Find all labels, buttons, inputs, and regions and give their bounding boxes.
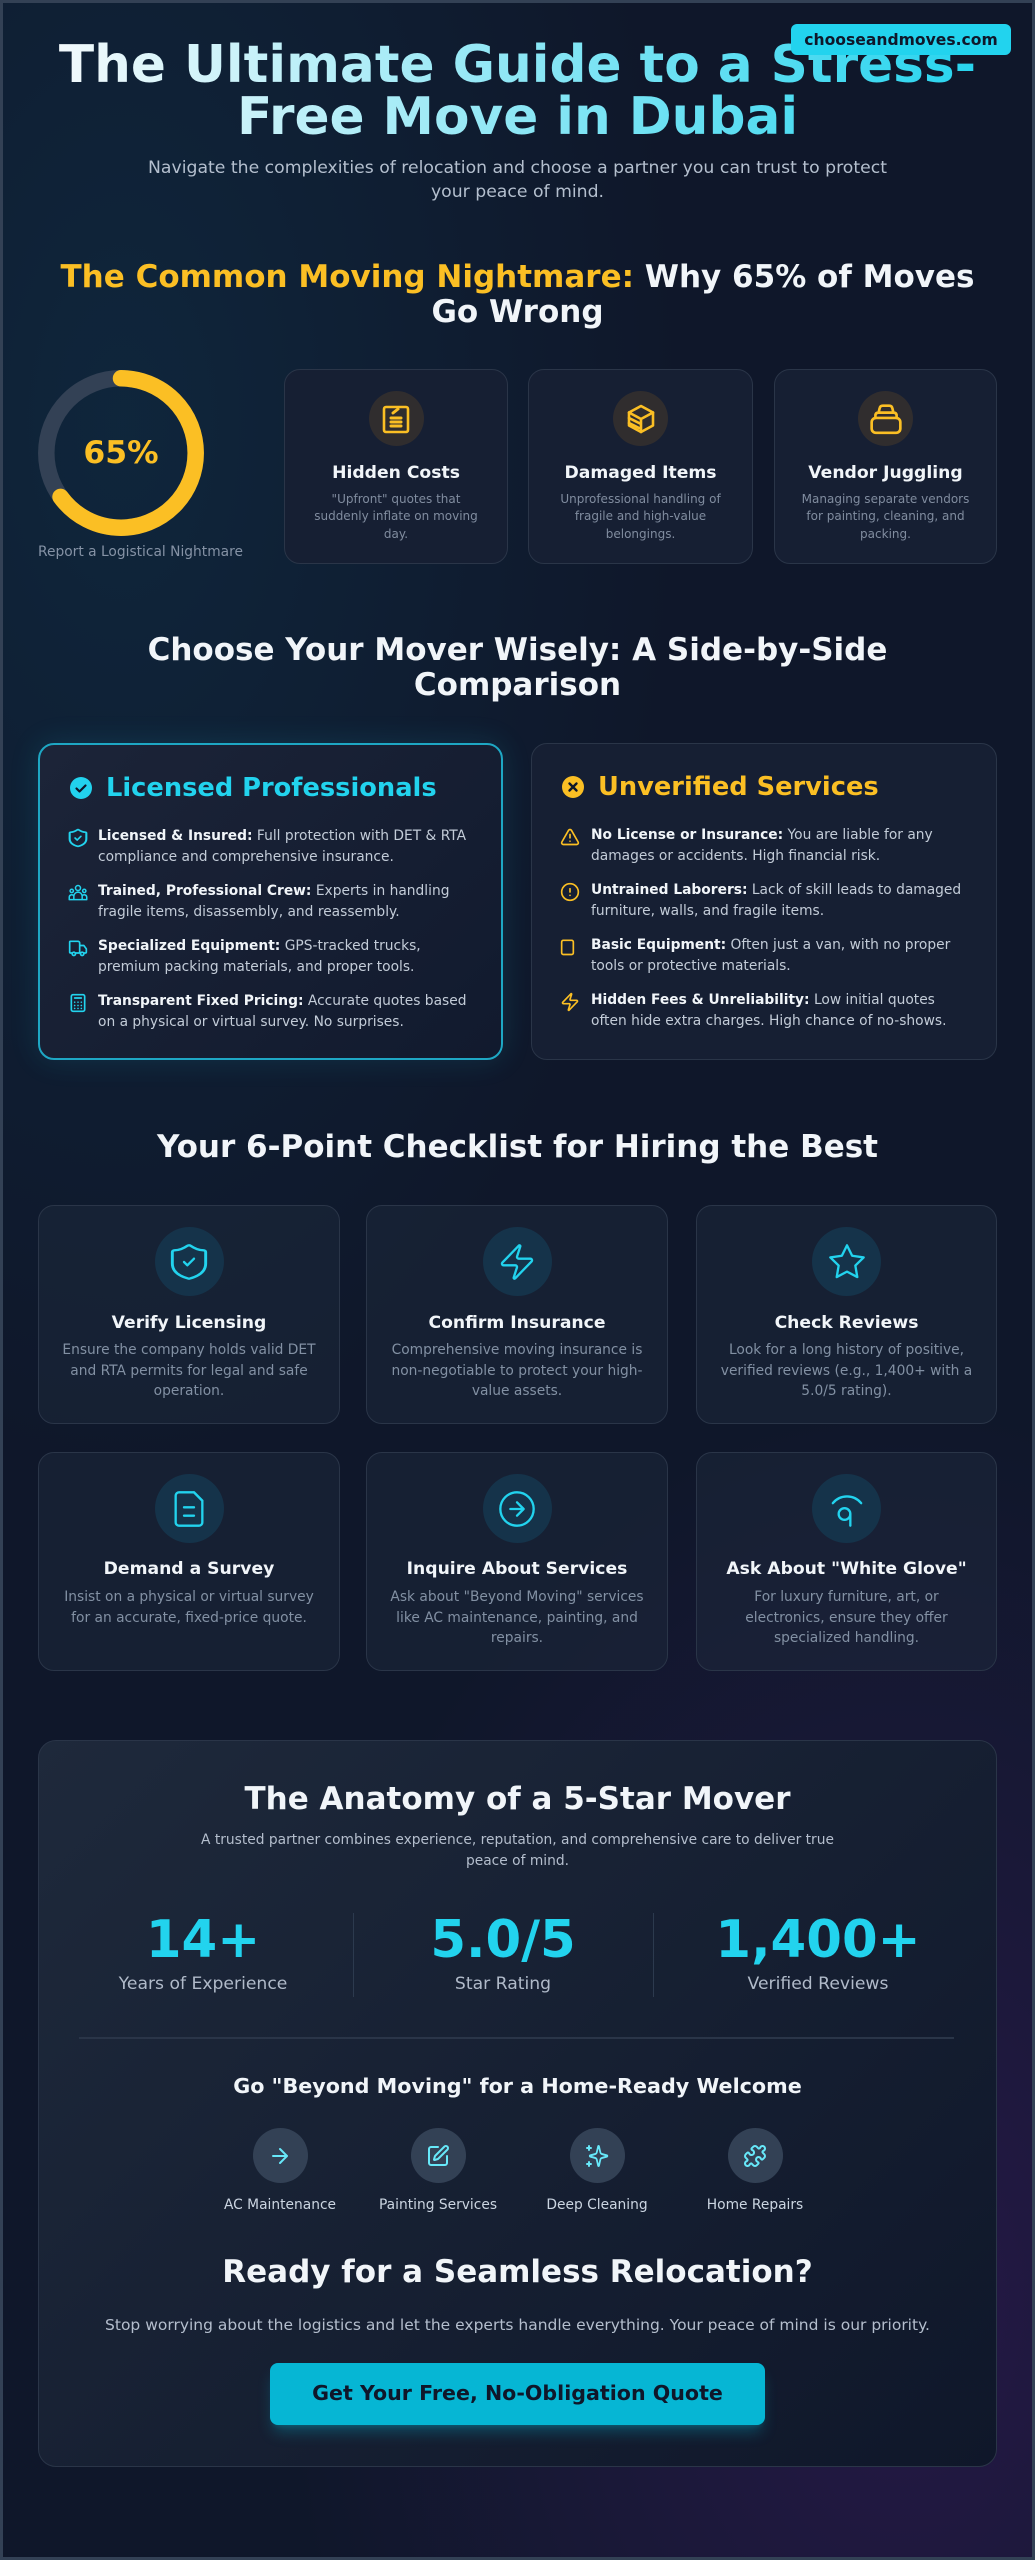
checklist card: verify licensing — [38, 1205, 340, 1424]
icon: shield — [68, 828, 88, 848]
subtitle: your peace of mind. — [431, 182, 604, 202]
donut chart: 65% — [38, 370, 243, 560]
donut caption: Report a Logistical Nightmare — [38, 544, 243, 560]
checklist card: demand a survey — [38, 1452, 340, 1671]
card text: electronics, ensure they offer — [745, 1610, 948, 1626]
card text: like AC maintenance, painting, and — [396, 1610, 638, 1626]
card title: Damaged Items — [564, 463, 717, 483]
checklist card: white glove — [696, 1452, 997, 1671]
service: home repairs — [707, 2128, 803, 2213]
feature: untrained: Untrained Laborers: Lack of skill leads to damaged — [591, 882, 961, 898]
card: vendor juggling — [774, 369, 997, 564]
panel heading: The Anatomy of a 5-Star Mover — [245, 1781, 790, 1817]
icon: calculator — [70, 994, 86, 1012]
feature: no license: No License or Insurance: You are liable for any — [591, 827, 933, 843]
card text: value assets. — [472, 1383, 562, 1399]
feature: basic equipment: tools or protective materials. — [591, 958, 791, 974]
stat: reviews: 1,400+ — [715, 1910, 921, 1970]
card text — [721, 1342, 972, 1399]
heading: comparison: Comparison — [414, 667, 621, 703]
feature: pricing: Transparent Fixed Pricing: Accurate quotes based — [98, 993, 466, 1009]
donut ring — [38, 370, 204, 536]
feature: equipment — [98, 938, 421, 975]
icon: crew — [68, 884, 88, 900]
card text: verified reviews (e.g., 1,400+ with a — [721, 1363, 972, 1379]
panel intro: peace of mind. — [466, 1853, 569, 1869]
card: damaged items — [528, 369, 753, 564]
card text: Look for a long history of positive, — [729, 1342, 964, 1358]
feature: licensed: Licensed & Insured: Full protection with DET & RTA — [98, 828, 466, 844]
card text: packing. — [860, 527, 911, 541]
feature: licensed — [98, 828, 466, 865]
card: hidden costs — [284, 369, 508, 564]
feature: hidden fees: often hide extra charges. High chance of no-shows. — [591, 1013, 946, 1029]
feature: equipment: Specialized Equipment: GPS-tracked trucks, — [98, 938, 421, 954]
card title: Verify Licensing — [112, 1313, 266, 1333]
feature: basic equipment — [591, 937, 950, 974]
icon: arrow — [252, 2128, 308, 2183]
heading: common moving nightmare — [60, 259, 974, 330]
feature: crew: fragile items, disassembly, and reassembly. — [98, 904, 400, 920]
card text — [64, 1589, 314, 1626]
heading: checklist: Your 6-Point Checklist for Hiring the Best — [157, 1129, 878, 1165]
subtitle — [148, 158, 887, 202]
feature: hidden fees: Hidden Fees & Unreliability: Low initial quotes — [591, 992, 935, 1008]
subtitle: Navigate the complexities of relocation and choose a partner you can trust to protect — [148, 158, 887, 178]
icon: star — [812, 1227, 881, 1296]
stat: reviews: Verified Reviews — [748, 1974, 888, 1994]
panel: licensed professionals — [38, 743, 503, 1060]
panel heading: Unverified Services — [598, 772, 879, 802]
icon: stacked vendors — [858, 391, 913, 446]
panel heading: Licensed Professionals — [106, 773, 437, 803]
website badge — [791, 24, 1011, 55]
card title: Confirm Insurance — [428, 1313, 606, 1333]
feature: basic equipment: Basic Equipment: Often just a van, with no proper — [591, 937, 950, 953]
feature: no license — [591, 827, 933, 864]
card text: Ensure the company holds valid DET — [62, 1342, 316, 1358]
card text: repairs. — [491, 1630, 543, 1646]
heading: comparison: Choose Your Mover Wisely: A Side-by-Side — [148, 632, 887, 668]
icon: lightning — [562, 992, 578, 1012]
button: get quote — [270, 2363, 765, 2425]
feature: licensed: compliance and comprehensive insurance. — [98, 849, 394, 865]
icon: truck — [68, 940, 88, 956]
stat: rating: Star Rating — [455, 1974, 551, 1994]
card text: specialized handling. — [774, 1630, 919, 1646]
title: Free Move in Dubai — [237, 87, 798, 147]
label: Painting Services — [379, 2197, 497, 2213]
call to action text: Stop worrying about the logistics and let the experts handle everything. Your peace of mind is our priority. — [105, 2316, 930, 2334]
feature: hidden fees — [591, 992, 946, 1029]
panel: anatomy of a 5-star mover — [38, 1740, 997, 2467]
title: The Ultimate Guide to a Stress- — [59, 35, 976, 95]
card text: 5.0/5 rating). — [801, 1383, 892, 1399]
service: painting — [379, 2128, 497, 2213]
card text — [391, 1342, 643, 1399]
feature: untrained — [591, 882, 961, 919]
feature: pricing — [98, 993, 466, 1030]
card text: Comprehensive moving insurance is — [392, 1342, 642, 1358]
panel intro: A trusted partner combines experience, reputation, and comprehensive care to deliver true — [201, 1832, 834, 1848]
subheading: beyond moving: Go "Beyond Moving" for a Home-Ready Welcome — [233, 2074, 802, 2098]
feature: untrained: furniture, walls, and fragile items. — [591, 903, 824, 919]
icon: puzzle — [728, 2128, 782, 2183]
card text: for painting, cleaning, and — [806, 509, 965, 523]
heading: comparison — [148, 632, 887, 703]
card title: Check Reviews — [775, 1313, 918, 1333]
icon: pen — [410, 2128, 466, 2183]
card text: and RTA permits for legal and safe — [70, 1363, 308, 1379]
feature: pricing: on a physical or virtual survey. No surprises. — [98, 1014, 404, 1030]
icon: shield check — [154, 1227, 224, 1296]
feature: no license: damages or accidents. High financial risk. — [591, 848, 880, 864]
stat: years: 14+ — [146, 1910, 260, 1970]
icon: document — [154, 1474, 224, 1543]
icon: alert — [560, 882, 580, 902]
icon: lightning — [482, 1227, 552, 1296]
feature: equipment: premium packing materials, and proper tools. — [98, 959, 414, 975]
icon: check circle — [70, 777, 92, 799]
label: Deep Cleaning — [546, 2197, 648, 2213]
card text: "Upfront" quotes that — [332, 492, 460, 506]
card text — [390, 1589, 644, 1646]
checklist card: check reviews — [696, 1205, 997, 1424]
service: AC maintenance — [224, 2128, 336, 2213]
button: get quote: Get Your Free, No-Obligation Quote — [312, 2381, 723, 2405]
icon: box — [613, 391, 668, 446]
service: deep cleaning — [546, 2128, 648, 2213]
card text — [314, 492, 478, 541]
card text: for an accurate, fixed-price quote. — [71, 1610, 307, 1626]
icon: white glove — [812, 1474, 881, 1543]
heading: common moving nightmare: The Common Moving Nightmare: Why 65% of Moves — [61, 259, 974, 295]
website badge: chooseandmoves.com — [804, 31, 998, 49]
label: Home Repairs — [707, 2197, 803, 2213]
card title: Demand a Survey — [104, 1559, 274, 1579]
feature: crew — [98, 883, 449, 920]
card title: Vendor Juggling — [808, 463, 963, 483]
card text: non-negotiable to protect your high- — [391, 1363, 643, 1379]
checklist card: inquire about services — [366, 1452, 668, 1671]
icon: basic van — [560, 940, 574, 956]
stat: years: Years of Experience — [119, 1974, 287, 1994]
card text: day. — [384, 527, 408, 541]
card title: Ask About "White Glove" — [726, 1559, 967, 1579]
checklist card: confirm insurance — [366, 1205, 668, 1424]
title — [33, 39, 1002, 143]
icon: arrow circle — [482, 1474, 552, 1543]
card text: Ask about "Beyond Moving" services — [390, 1589, 644, 1605]
feature: crew: Trained, Professional Crew: Experts in handling — [98, 883, 449, 899]
card text — [560, 492, 721, 541]
stat: rating: 5.0/5 — [430, 1910, 576, 1970]
card text: Managing separate vendors — [802, 492, 969, 506]
card text — [802, 492, 969, 541]
card text: fragile and high-value — [575, 509, 706, 523]
card text: suddenly inflate on moving — [314, 509, 478, 523]
icon: sparkles — [570, 2128, 624, 2183]
panel intro — [201, 1832, 834, 1869]
icon: warning — [560, 828, 580, 846]
card text — [62, 1342, 316, 1399]
stat: years — [118, 1910, 287, 1994]
card title: Hidden Costs — [332, 463, 460, 483]
heading: common moving nightmare: Go Wrong — [431, 294, 604, 330]
card text: Insist on a physical or virtual survey — [64, 1589, 314, 1605]
card text — [745, 1589, 948, 1646]
panel: unverified services — [531, 743, 997, 1060]
card title: Inquire About Services — [407, 1559, 627, 1579]
icon: hidden costs — [368, 391, 424, 446]
card text: For luxury furniture, art, or — [754, 1589, 939, 1605]
heading: call to action: Ready for a Seamless Relocation? — [222, 2254, 813, 2290]
donut value: 65% — [83, 435, 159, 471]
card text: belongings. — [606, 527, 675, 541]
card text: operation. — [154, 1383, 224, 1399]
card text: Unprofessional handling of — [560, 492, 721, 506]
label: AC Maintenance — [224, 2197, 336, 2213]
icon: x circle — [562, 776, 584, 798]
